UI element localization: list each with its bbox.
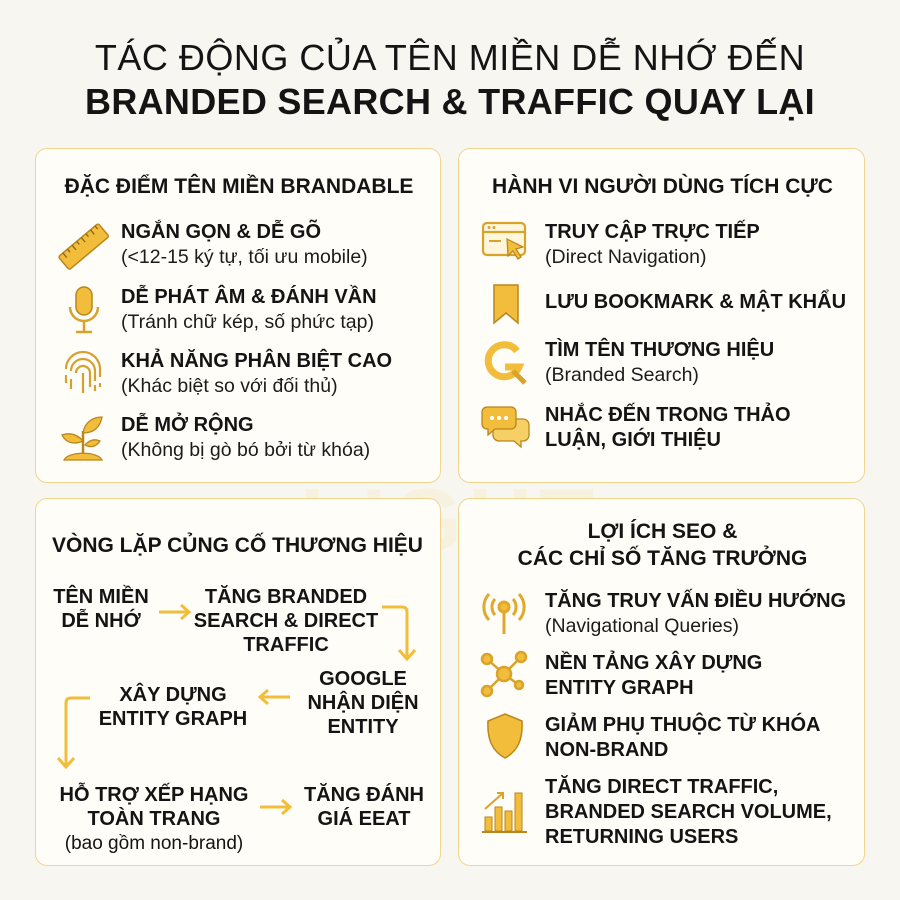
panel: positive user behavior xyxy=(458,148,865,483)
item 3: KHẢ NĂNG PHÂN BIỆT CAO xyxy=(121,350,392,372)
heading xyxy=(518,519,807,570)
icon: chat bubbles xyxy=(481,406,530,448)
heading: HÀNH VI NGƯỜI DÙNG TÍCH CỰC xyxy=(492,175,833,198)
item 3 xyxy=(545,712,820,761)
item 3: TÌM TÊN THƯƠNG HIỆU xyxy=(545,339,774,361)
watermark: LIGHT xyxy=(300,471,600,571)
node: entity graph xyxy=(99,682,247,730)
icon: shield xyxy=(487,713,523,759)
item 4: DỄ MỞ RỘNG xyxy=(121,414,254,436)
heading: LỢI ÍCH SEO & xyxy=(588,520,737,543)
item 2: DỄ PHÁT ÂM & ĐÁNH VẦN xyxy=(121,286,377,308)
item 2: ENTITY GRAPH xyxy=(545,677,694,699)
node: ranking support: (bao gồm non-brand) xyxy=(65,833,243,854)
icon: G search xyxy=(484,341,527,385)
node: branded search: SEARCH & DIRECT xyxy=(194,610,378,632)
heading: VÒNG LẶP CỦNG CỐ THƯƠNG HIỆU xyxy=(52,534,423,557)
node: memorable domain: DỄ NHỚ xyxy=(61,610,141,632)
node: branded search: TRAFFIC xyxy=(243,634,329,656)
arrow: left xyxy=(258,689,290,705)
panel: brandable traits: (Tránh chữ kép, số phức tạp) xyxy=(121,311,374,333)
item 4: TĂNG DIRECT TRAFFIC, xyxy=(545,776,778,798)
arrow: elbow down left xyxy=(57,696,90,770)
item 4: NHẮC ĐẾN TRONG THẢO xyxy=(545,404,791,426)
panel: positive user behavior: (Direct Navigation) xyxy=(545,246,706,268)
panel: brand reinforcement loop xyxy=(35,498,441,866)
node: ranking support xyxy=(60,782,248,854)
item 3: NON-BRAND xyxy=(545,739,668,761)
panel: positive user behavior: (Branded Search) xyxy=(545,364,699,386)
node: branded search xyxy=(194,585,378,656)
arrow: elbow down xyxy=(382,606,416,662)
panel: brandable traits xyxy=(35,148,441,483)
item 4: LUẬN, GIỚI THIỆU xyxy=(545,429,721,451)
node: ranking support: TOÀN TRANG xyxy=(88,808,220,830)
item 1: TRUY CẬP TRỰC TIẾP xyxy=(545,221,760,243)
node: EEAT: TĂNG ĐÁNH xyxy=(304,784,424,806)
node: google entity: NHẬN DIỆN xyxy=(307,692,419,714)
title: BRANDED SEARCH & TRAFFIC QUAY LẠI xyxy=(85,81,815,122)
panel: brandable traits: (<12-15 ký tự, tối ưu mobile) xyxy=(121,246,368,268)
arrow: right 2 xyxy=(260,799,292,815)
panel: SEO benefits xyxy=(458,498,865,866)
panel: brandable traits: (Không bị gò bó bởi từ khóa) xyxy=(121,439,370,461)
node: google entity xyxy=(307,668,419,738)
item 2 xyxy=(545,650,762,699)
icon: fingerprint xyxy=(64,350,102,393)
node: EEAT xyxy=(304,783,424,830)
icon: browser cursor xyxy=(482,222,526,260)
item 1: NGẮN GỌN & DỄ GÕ xyxy=(121,221,321,243)
item 4: BRANDED SEARCH VOLUME, xyxy=(545,801,832,823)
title xyxy=(85,37,815,122)
title: TÁC ĐỘNG CỦA TÊN MIỀN DỄ NHỚ ĐẾN xyxy=(95,37,805,78)
node: entity graph: XÂY DỰNG xyxy=(119,684,227,706)
icon: ruler xyxy=(58,224,109,270)
icon: bookmark xyxy=(493,284,519,324)
node: google entity: ENTITY xyxy=(327,716,399,738)
node: entity graph: ENTITY GRAPH xyxy=(99,708,247,730)
icon: network xyxy=(480,650,528,698)
heading: ĐẶC ĐIỂM TÊN MIỀN BRANDABLE xyxy=(65,175,413,198)
panel: brandable traits: (Khác biệt so với đối thủ) xyxy=(121,375,338,397)
icon: sprout xyxy=(61,416,103,461)
node: google entity: GOOGLE xyxy=(319,668,407,690)
node: ranking support: HỖ TRỢ XẾP HẠNG xyxy=(60,784,248,806)
node: memorable domain: TÊN MIỀN xyxy=(53,586,149,608)
node: memorable domain xyxy=(53,584,149,632)
node: EEAT: GIÁ EEAT xyxy=(318,808,410,830)
item 2: LƯU BOOKMARK & MẬT KHẨU xyxy=(545,291,846,313)
icon: microphone xyxy=(68,286,100,334)
item 2: NỀN TẢNG XÂY DỰNG xyxy=(545,652,762,674)
item 3: GIẢM PHỤ THUỘC TỪ KHÓA xyxy=(545,714,820,736)
heading: CÁC CHỈ SỐ TĂNG TRƯỞNG xyxy=(518,547,807,570)
arrow: right 1 xyxy=(159,604,192,620)
item 1: TĂNG TRUY VẤN ĐIỀU HƯỚNG xyxy=(545,590,846,612)
icon: signal xyxy=(482,593,526,634)
icon: bar chart xyxy=(482,792,527,833)
panel: SEO benefits: (Navigational Queries) xyxy=(545,615,739,637)
node: branded search: TĂNG BRANDED xyxy=(205,586,367,608)
item 4: RETURNING USERS xyxy=(545,826,738,848)
item 4 xyxy=(545,402,791,451)
item 4 xyxy=(545,775,832,848)
